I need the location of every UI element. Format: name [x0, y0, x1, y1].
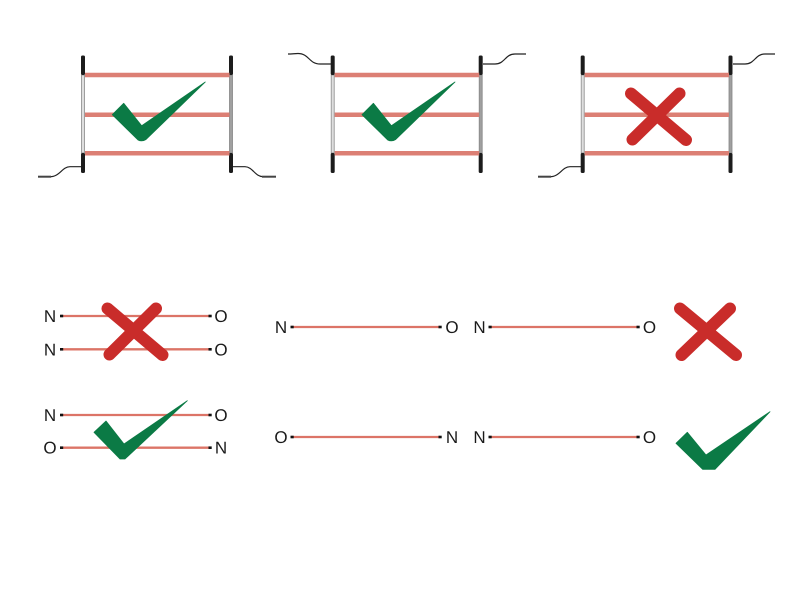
line N to O upper: O: [214, 307, 228, 326]
line O to N left: [274, 428, 458, 447]
line N to O: O: [214, 406, 228, 425]
icon: green check: [676, 412, 770, 469]
diagram: parallel N-O lines, rejected: [44, 307, 228, 359]
icon: red cross: [680, 308, 736, 355]
beams: [585, 75, 729, 153]
diagram: facing separated lines, approved: [274, 412, 770, 469]
line N to O upper: N: [44, 307, 56, 326]
icon: red cross: [631, 94, 686, 140]
line N to O left: O: [445, 318, 459, 337]
wire left: [38, 167, 81, 177]
wire right: [483, 54, 526, 64]
line N to O left: N: [275, 318, 287, 337]
line N to O lower: N: [44, 340, 56, 359]
wire left: [538, 167, 581, 177]
panel: beam pair wired on opposite ends, rejected: [538, 54, 775, 177]
panel: beam pair wired top both sides, approved: [288, 54, 526, 173]
line O to N: [43, 439, 227, 458]
line O to N left: N: [446, 428, 458, 447]
line N to O lower: [44, 340, 228, 359]
left post: [81, 56, 85, 173]
line N to O right: [473, 318, 656, 337]
wire right: [733, 54, 775, 64]
line O to N: N: [215, 439, 227, 458]
icon: green check: [112, 82, 205, 141]
right post: [229, 56, 233, 173]
line N to O right: N: [473, 428, 486, 447]
line N to O: N: [44, 406, 56, 425]
left post: [581, 56, 585, 173]
wire left: [288, 54, 331, 64]
right post: [728, 56, 732, 173]
line N to O lower: O: [214, 340, 228, 359]
line O to N: O: [43, 439, 57, 458]
beams: [335, 75, 479, 153]
line N to O right: O: [643, 428, 656, 447]
wire right: [233, 167, 276, 177]
line O to N left: O: [274, 428, 288, 447]
icon: green check: [94, 401, 187, 459]
line N to O left: [275, 318, 459, 337]
right post: [479, 56, 483, 173]
panel: beam pair wired bottom both sides, approved: [38, 56, 276, 177]
line N to O right: [473, 428, 656, 447]
line N to O right: O: [643, 318, 656, 337]
icon: green check: [362, 82, 455, 141]
left post: [331, 56, 335, 173]
icon: red cross: [108, 308, 162, 355]
diagram: same-direction separated lines, rejected: [275, 308, 736, 355]
diagram: opposed N-O lines, approved: [43, 401, 228, 459]
line N to O: [44, 406, 228, 425]
line N to O right: N: [473, 318, 486, 337]
line N to O upper: [44, 307, 228, 326]
beams: [85, 75, 230, 153]
